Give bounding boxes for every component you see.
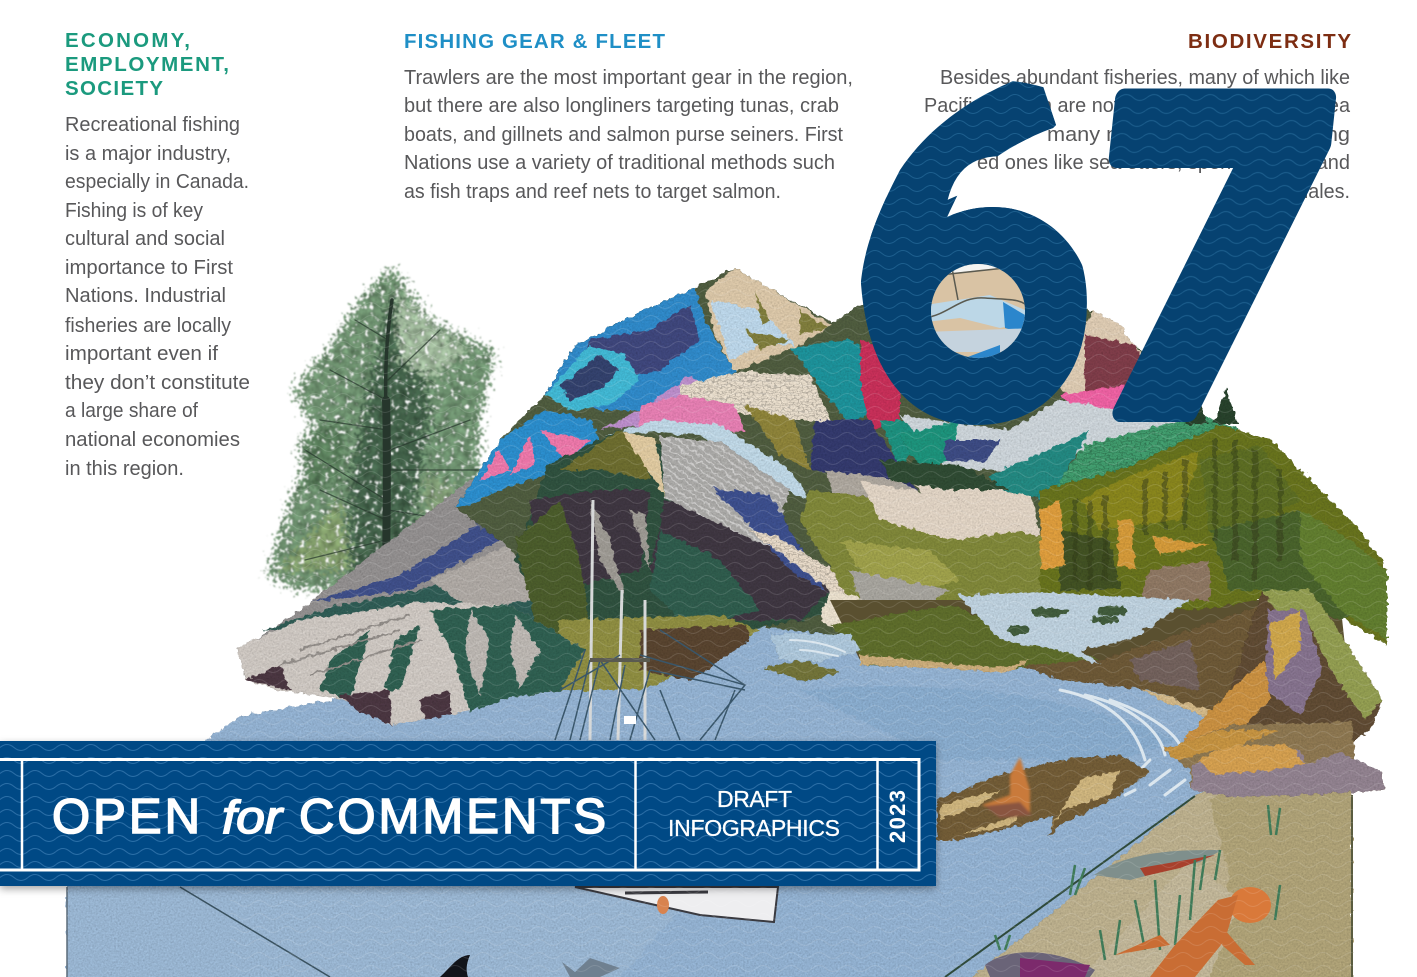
right forest hill	[1040, 425, 1387, 645]
octopus	[1115, 887, 1271, 977]
banner subtitle	[668, 786, 840, 841]
heading: fishing gear and fleet: FISHING GEAR & FLEET	[404, 30, 665, 53]
text block: economy, employment, society: Nations. Industrial	[65, 285, 226, 307]
illustration: coastal landscape	[67, 262, 1390, 977]
distant pines	[1186, 388, 1238, 424]
meadow and lowland	[800, 460, 1060, 640]
banner: open for comments	[0, 741, 936, 886]
banner title: COMMENTS	[299, 790, 606, 844]
lake	[958, 592, 1190, 665]
banner frame	[0, 760, 919, 870]
headland	[1170, 590, 1382, 760]
text block: economy, employment, society: in this region.	[65, 458, 184, 480]
heading: economy, employment, society: SOCIETY	[65, 77, 163, 100]
sea lion	[982, 757, 1032, 818]
salmon fish	[1094, 850, 1222, 880]
bay surf	[790, 640, 1185, 795]
orca fin	[440, 955, 470, 977]
banner title: OPEN	[52, 790, 200, 844]
text block: fishing gear and fleet: but there are also longliners targeting tunas, crab	[404, 95, 839, 117]
big numeral 67: 7	[1055, 13, 1366, 514]
text block: economy, employment, society: especially in Canada.	[65, 171, 249, 193]
banner subtitle: INFOGRAPHICS	[668, 815, 840, 841]
text block: fishing gear and fleet: boats, and gillnets and salmon purse seiners. First	[404, 124, 843, 146]
fishing boat masts and rigging	[555, 500, 745, 740]
seabed	[945, 730, 1352, 977]
purple salmon	[985, 952, 1095, 977]
text block: economy, employment, society: is a major industry,	[65, 143, 231, 165]
shoreline	[560, 605, 1260, 722]
text block: biodiversity	[924, 67, 1351, 203]
text block: fishing gear and fleet: Nations use a variety of traditional methods such	[404, 152, 835, 174]
fish tail	[562, 958, 620, 977]
mountain range	[455, 268, 1180, 640]
seagrass	[995, 805, 1280, 960]
numeral counter showing mountain peak	[931, 264, 1025, 358]
text block: economy, employment, society	[65, 114, 250, 480]
text block: fishing gear and fleet: as fish traps and reef nets to target salmon.	[404, 181, 781, 203]
water	[67, 600, 1352, 977]
bottom right rocks	[1165, 722, 1385, 797]
tree	[268, 268, 495, 590]
left edge line	[66, 887, 68, 977]
banner title: for	[222, 791, 284, 843]
banner subtitle: DRAFT	[717, 786, 792, 812]
text block: economy, employment, society: national economies	[65, 429, 240, 451]
tree trunk	[305, 300, 480, 592]
left slope	[240, 420, 620, 660]
text block: economy, employment, society: a large share of	[65, 400, 198, 422]
text block: biodiversity: ed ones like sea otters, sperm whales and	[977, 152, 1350, 174]
big numeral 67: 6	[848, 14, 1096, 508]
left promontory	[237, 603, 585, 725]
longline	[180, 887, 330, 977]
heading: economy, employment, society	[65, 29, 229, 100]
text block: biodiversity: whales.	[1282, 181, 1350, 203]
text block: biodiversity: many marine species, including	[1047, 124, 1350, 146]
banner year: 2023	[885, 790, 910, 843]
heading: economy, employment, society: EMPLOYMENT,	[65, 53, 229, 76]
big numeral 67	[860, 81, 1336, 425]
wave texture overlay	[230, 262, 1390, 977]
banner title	[52, 790, 606, 844]
text block: economy, employment, society: Fishing is of key	[65, 200, 203, 222]
text block: economy, employment, society: importance to First	[65, 257, 233, 279]
land base behind shore	[830, 600, 1352, 730]
fishing boat hull	[575, 887, 778, 922]
mountain right ridge behind numeral	[900, 310, 1240, 520]
text block: fishing gear and fleet	[404, 67, 853, 203]
heading: economy, employment, society: ECONOMY,	[65, 29, 190, 52]
banner background	[0, 741, 936, 886]
text block: fishing gear and fleet: Trawlers are the most important gear in the region,	[404, 67, 853, 89]
seabed edge line	[945, 796, 1195, 977]
text block: economy, employment, society: cultural and social	[65, 228, 225, 250]
heading: biodiversity: BIODIVERSITY	[1188, 30, 1351, 53]
dark forest slope	[515, 430, 865, 640]
right edge line	[1351, 795, 1353, 977]
text block: economy, employment, society: Recreational fishing	[65, 114, 240, 136]
text block: economy, employment, society: they don’t constitute	[65, 372, 250, 394]
text block: biodiversity: Besides abundant fisheries, many of which like	[940, 67, 1350, 89]
sea lion rock	[937, 755, 1150, 840]
text block: economy, employment, society: fisheries are locally	[65, 315, 231, 337]
text block: economy, employment, society: important even if	[65, 343, 218, 365]
text block: biodiversity: Pacific salmon are noted for migrating to the sea	[924, 95, 1351, 117]
